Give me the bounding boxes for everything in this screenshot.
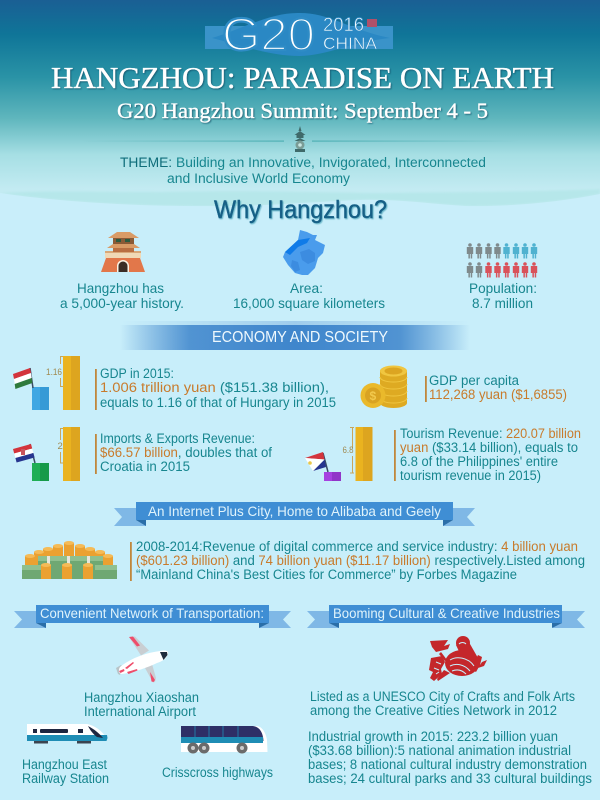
text: industrial growth — [308, 729, 592, 786]
icon: gold coins — [360, 366, 407, 408]
label: population: Population: — [469, 280, 537, 296]
label: airport — [84, 690, 199, 719]
panel: highways — [162, 726, 273, 780]
label: area — [233, 280, 385, 311]
panel: history — [60, 232, 184, 311]
ribbon: transportation — [14, 605, 291, 628]
text: UNESCO: Listed as a UNESCO City of Crafts and Folk Arts — [310, 689, 575, 704]
heading: economy and society — [120, 321, 470, 350]
icon: gold coins: $ — [370, 389, 376, 403]
panel: UNESCO — [308, 636, 592, 786]
bar chart: tourism vs Philippines — [305, 427, 372, 481]
bar chart: GDP vs Hungary — [13, 356, 80, 410]
ribbon: cultural industries: Booming Cultural & Creative Industries — [333, 605, 560, 621]
text: imports and exports: Imports & Exports Revenue: — [100, 431, 255, 446]
label: history — [60, 280, 184, 311]
text: tourism: yuan ($33.14 billion), equals to — [400, 440, 578, 455]
ribbon: internet plus city — [114, 502, 475, 526]
icon: stone lantern divider — [80, 126, 520, 152]
theme text — [120, 155, 486, 186]
panel: area — [233, 230, 385, 311]
G20 logo: CHINA — [323, 34, 378, 53]
label: railway: Railway Station — [22, 771, 109, 786]
text: UNESCO: among the Creative Cities Network in 2012 — [310, 703, 557, 718]
text: industrial growth: bases; 24 cultural parks and 33 cultural buildings — [308, 771, 592, 786]
heading: Why Hangzhou: Why Hangzhou? — [214, 196, 387, 224]
text: GDP: equals to 1.16 of that of Hungary in 2015 — [100, 395, 336, 410]
G20 logo: 2016 — [323, 15, 364, 36]
text: digital commerce: ($601.23 billion) and 74 billion yuan ($11.17 billion) respectively.Listed among — [136, 553, 585, 568]
label: history: Hangzhou has — [77, 280, 164, 296]
label: population — [469, 280, 537, 311]
icon: people rows — [467, 243, 537, 278]
bar chart: tourism vs Philippines: 6.8 — [342, 445, 354, 456]
label: highways: Crisscross highways — [162, 765, 273, 780]
panel: railway — [22, 724, 109, 786]
panel: tourism — [305, 426, 581, 483]
text: imports and exports: $66.57 billion, doubles that of — [100, 445, 272, 460]
text: GDP per capita: 112,268 yuan ($1,6855) — [429, 387, 567, 402]
icon: ancient gate tower — [101, 232, 145, 272]
text: industrial growth: bases; 8 national cultural industry demonstration — [308, 757, 587, 772]
text: GDP per capita: GDP per capita — [429, 373, 519, 388]
G20 logo: G20 — [222, 9, 315, 60]
panel: GDP per capita — [360, 366, 567, 408]
text: UNESCO — [310, 689, 575, 718]
panel: digital commerce — [22, 539, 585, 582]
ribbon: transportation: Convenient Network of Transportation: — [40, 605, 264, 621]
panel: imports and exports — [13, 427, 272, 481]
theme text: and Inclusive World Economy — [167, 171, 350, 186]
G20 logo — [205, 9, 393, 60]
bar chart: trade vs Croatia — [13, 427, 80, 481]
bar chart: trade vs Croatia: 2 — [58, 441, 63, 452]
panel: airport — [84, 636, 199, 719]
text: tourism — [394, 426, 581, 483]
label: airport: International Airport — [84, 704, 196, 719]
text: imports and exports: Croatia in 2015 — [100, 459, 190, 474]
icon: high-speed train — [27, 724, 108, 744]
label: airport: Hangzhou Xiaoshan — [84, 690, 199, 705]
text: imports and exports — [95, 431, 272, 474]
panel: population — [467, 243, 537, 311]
text: tourism: 6.8 of the Philippines' entire — [400, 454, 558, 469]
text: GDP — [95, 366, 336, 410]
heading: economy and society: ECONOMY AND SOCIETY — [212, 329, 388, 346]
icon: money and coin stacks — [22, 541, 117, 579]
text: GDP: GDP in 2015: — [100, 366, 174, 381]
icon: Zhejiang map — [283, 230, 325, 275]
text: tourism: Tourism Revenue: 220.07 billion — [400, 426, 581, 441]
icon: bus — [181, 726, 268, 754]
text: industrial growth: ($33.68 billion):5 national animation industrial — [308, 743, 571, 758]
header background — [0, 0, 600, 220]
text: GDP: 1.006 trillion yuan ($151.38 billion), — [100, 380, 329, 395]
icon: paper-cut bird — [429, 636, 487, 681]
text: digital commerce: 2008-2014:Revenue of digital commerce and service industry: 4 billion yuan — [136, 539, 578, 554]
label: area: 16,000 square kilometers — [233, 295, 385, 311]
bar chart: GDP vs Hungary: 1.16 — [46, 367, 62, 378]
label: history: a 5,000-year history. — [60, 295, 184, 311]
theme text: THEME: Building an Innovative, Invigorated, Interconnected — [120, 155, 486, 170]
ribbon: cultural industries — [307, 605, 585, 628]
label: population: 8.7 million — [472, 295, 533, 311]
panel: GDP — [13, 356, 336, 410]
icon: airplane — [116, 636, 168, 682]
label: railway: Hangzhou East — [22, 757, 107, 772]
ribbon: internet plus city: An Internet Plus City, Home to Alibaba and Geely — [148, 503, 441, 519]
text: digital commerce: “Mainland China's Best Cities for Commerce” by Forbes Magazine — [136, 567, 517, 582]
text: GDP per capita — [425, 373, 567, 402]
subtitle: G20 Hangzhou Summit: September 4 - 5 — [117, 98, 488, 123]
text: industrial growth: Industrial growth in 2015: 223.2 billion yuan — [308, 729, 558, 744]
label: railway — [22, 757, 109, 786]
text: digital commerce — [130, 539, 585, 582]
title: HANGZHOU: PARADISE ON EARTH — [51, 60, 554, 95]
label: area: Area: — [290, 280, 323, 296]
text: tourism: tourism revenue in 2015) — [400, 468, 541, 483]
